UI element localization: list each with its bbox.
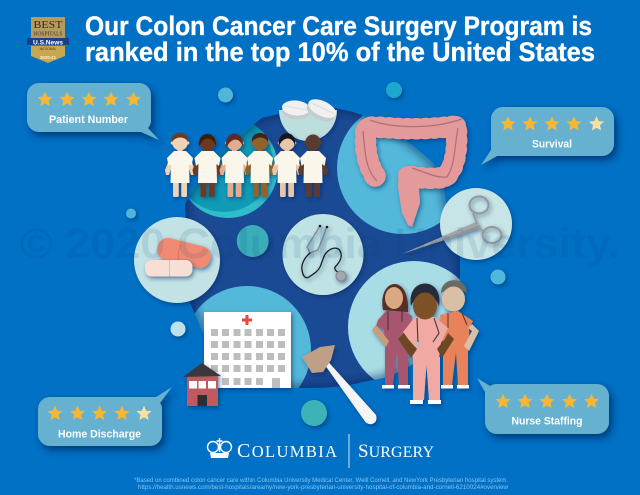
icon: colon (363, 119, 462, 227)
icon: reflex hammer (302, 345, 376, 424)
patient 1 (165, 133, 195, 197)
title: Our Colon Cancer Care Surgery Program is (85, 11, 592, 41)
panel: stethoscope circle (282, 214, 364, 295)
icon: crown (208, 438, 232, 458)
footnote: https://health.usnews.com/best-hospitals/area/ny/new-york-presbyterian-university-hospital-of-columbia-and-cornell-6210024#overview (138, 485, 509, 491)
windows (211, 329, 285, 388)
badge: US News best hospitals: NATIONAL (40, 47, 56, 51)
icon: scissors (402, 196, 502, 254)
bubble: Nurse Staffing: Nurse Staffing (512, 416, 582, 428)
nurse: right orange scrubs (440, 280, 479, 388)
icon: stethoscope (302, 225, 346, 281)
patient 5 (272, 133, 302, 197)
stars (47, 406, 152, 420)
bubble: Home Discharge (38, 387, 172, 446)
watermark: © 2020 Columbia University. (20, 220, 620, 268)
stars (500, 116, 604, 130)
patient 6 (298, 134, 328, 197)
badge: US News best hospitals: HOSPITALS (34, 30, 63, 38)
title (85, 11, 595, 67)
dot: teal top (386, 82, 402, 98)
bubble: Patient Number (27, 83, 159, 140)
bubble: Home Discharge: Home Discharge (58, 428, 141, 440)
bubble: Patient Number: Patient Number (49, 114, 129, 126)
stars (37, 92, 141, 106)
patient 3 (220, 134, 250, 197)
nurse: centre pink scrubs (398, 284, 454, 404)
bubble: Survival (481, 107, 614, 165)
icon: hospital (204, 312, 291, 388)
inner shadow of blue layer (185, 107, 460, 388)
panel: patients circle (188, 124, 278, 218)
nurses group (372, 280, 479, 404)
dot: left small (126, 208, 136, 218)
badge: US News best hospitals: BEST (34, 20, 62, 31)
icon: white tablets (279, 95, 339, 141)
dot: top left (218, 88, 233, 102)
stars (495, 394, 599, 408)
badge: US News best hospitals (27, 17, 69, 63)
navy central shape (185, 107, 460, 388)
logo: Columbia Surgery: SURGERY (358, 441, 434, 462)
dot: right (490, 270, 506, 284)
bubble: Survival: Survival (532, 138, 572, 150)
dot: teal centre (237, 225, 269, 257)
footnote (134, 478, 509, 491)
dot: teal bottom (301, 400, 327, 426)
dot: pale left (170, 322, 186, 336)
badge: US News best hospitals: U.S.News (33, 40, 63, 46)
patient 2 (192, 134, 222, 197)
panel: pills circle (134, 217, 220, 303)
logo: Columbia Surgery: COLUMBIA (237, 440, 337, 462)
patients group (165, 133, 328, 197)
bubble: Nurse Staffing (477, 378, 609, 434)
icon: salmon capsule (155, 236, 213, 270)
patient 4 (245, 133, 275, 197)
title: ranked in the top 10% of the United States (85, 37, 595, 67)
logo: Columbia Surgery (208, 434, 434, 468)
icon: white capsule (145, 260, 192, 276)
nurse: left plum scrubs (372, 284, 412, 388)
panel: nurses circle (348, 261, 460, 380)
panel: hospital circle (194, 286, 311, 388)
badge: US News best hospitals: 2020-21 (40, 55, 57, 60)
panel: scissors circle (402, 188, 512, 260)
panel: colon circle (337, 116, 446, 234)
footnote: *Based on combined colon cancer care within Columbia University Medical Center, Weill Cornell, and NewYork Presbyterian hospital system. (134, 478, 508, 484)
icon: red cross (242, 315, 252, 325)
icon: house (183, 363, 221, 406)
